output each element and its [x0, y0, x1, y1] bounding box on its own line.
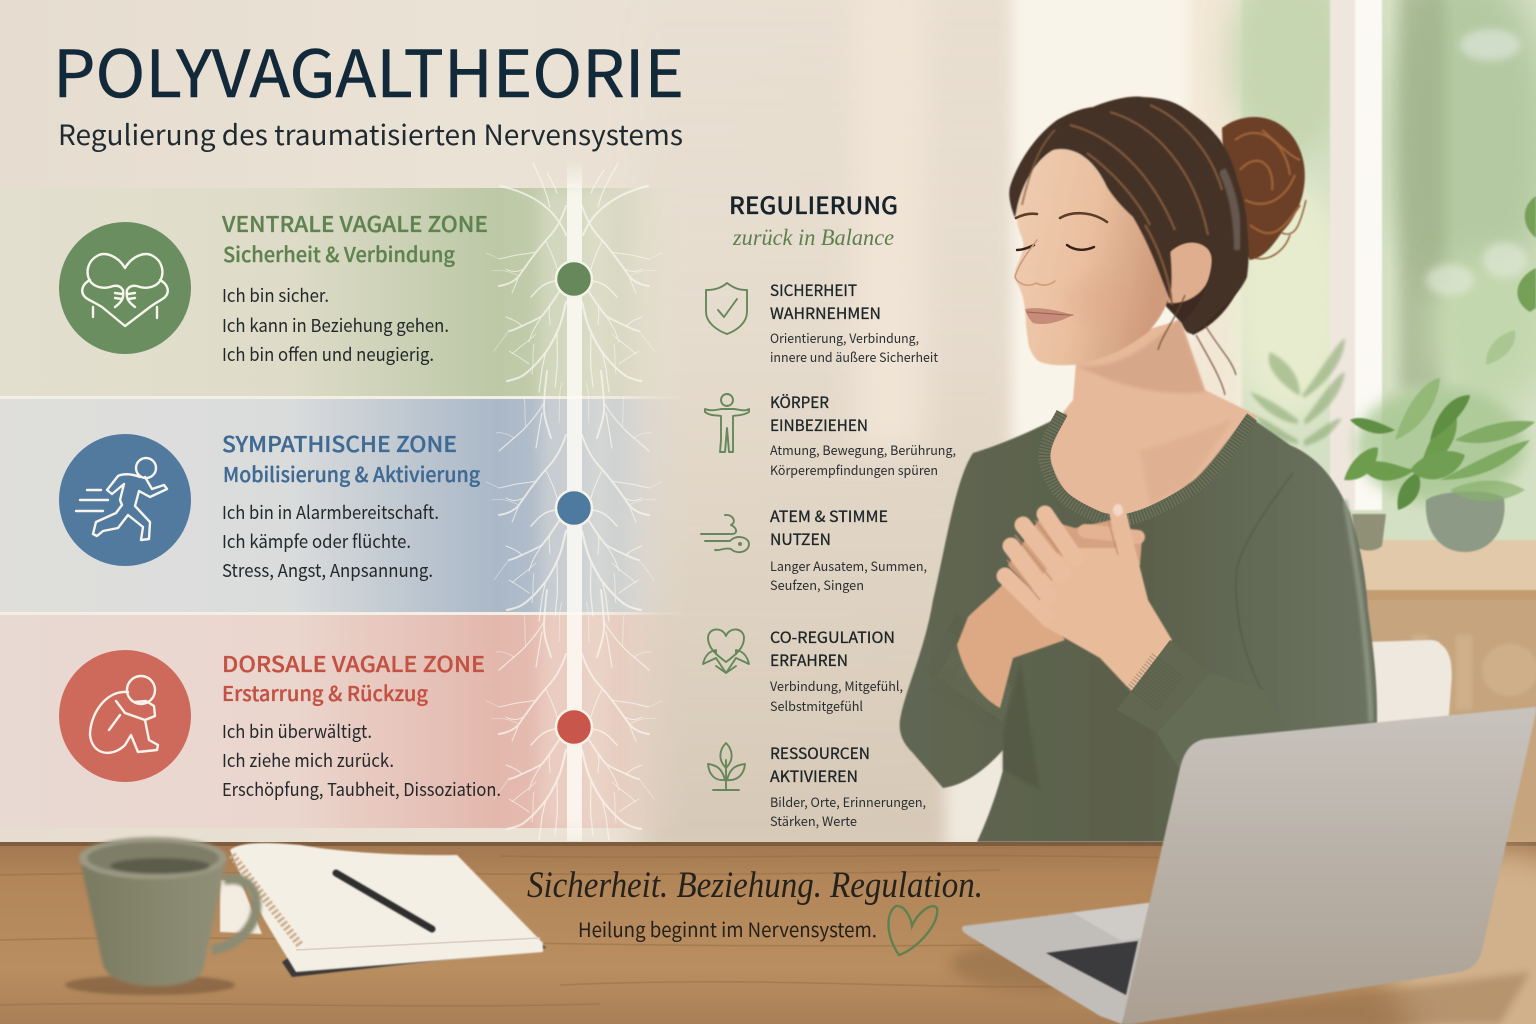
regulation item: Co-Regulation: Verbindung, Mitgefühl, [770, 676, 903, 695]
icon: breath wind [701, 515, 749, 552]
regulation item: Co-Regulation: Selbstmitgefühl [770, 696, 863, 715]
icon: hand-drawn heart [888, 906, 937, 955]
regulation item: Sicherheit wahrnehmen: Orientierung, Verbindung, [770, 328, 919, 347]
hair [1009, 97, 1249, 395]
window sill and shelf [1360, 540, 1536, 845]
neck and chest skin [1040, 320, 1258, 525]
regulation item: Ressourcen aktivieren: Bilder, Orte, Erinnerungen, [770, 792, 926, 811]
regulation item: Ressourcen aktivieren [708, 742, 926, 830]
central glow and band separators [0, 190, 690, 830]
chair back [1365, 640, 1453, 725]
regulation item: Körper einbeziehen: Körperempfindungen spüren [770, 460, 938, 479]
subheading: Mobilisierung & Aktivierung [223, 458, 480, 488]
right sleeve highlight and seams [1345, 500, 1371, 722]
regulation item: Co-Regulation: ERFAHREN [770, 649, 848, 671]
regulation item: Atem und Stimme: Seufzen, Singen [770, 575, 864, 594]
regulation item: Ressourcen aktivieren: Stärken, Werte [770, 811, 857, 830]
woman [900, 97, 1377, 842]
coffee mug [65, 837, 256, 995]
zone band: sympathetic [0, 399, 690, 612]
panel: dorsal vagal zone [59, 647, 501, 802]
regulation item: Körper einbeziehen: Atmung, Bewegung, Berührung, [770, 440, 956, 459]
statements: Erschöpfung, Taubheit, Dissoziation. [222, 776, 501, 802]
regulation item: Atem und Stimme: ATEM & STIMME [770, 505, 888, 527]
top hand [1005, 504, 1172, 692]
title: POLYVAGALTHEORIE [53, 22, 684, 116]
statements: Ich bin offen und neugierig. [222, 341, 434, 367]
left sleeve inner shade [1003, 660, 1040, 790]
regulation item: Atem und Stimme [701, 505, 927, 594]
node: dorsal [556, 709, 592, 745]
regulation item: Co-Regulation: CO-REGULATION [770, 626, 895, 648]
back hand and wrist [957, 575, 1065, 708]
table [0, 842, 1536, 1024]
statements: Stress, Angst, Anpsannung. [222, 557, 433, 583]
regulation item: Sicherheit wahrnehmen: SICHERHEIT [770, 279, 857, 301]
statements: Ich bin in Alarmbereitschaft. [222, 499, 439, 525]
regulation item: Körper einbeziehen: KÖRPER [770, 391, 829, 413]
icon: standing body [705, 394, 749, 452]
notebook and pen [220, 843, 546, 977]
statements [222, 718, 501, 802]
heading: SYMPATHISCHE ZONE [222, 427, 457, 459]
statements: Ich kämpfe oder flüchte. [222, 528, 411, 554]
background fern [1250, 338, 1345, 446]
heading: VENTRALE VAGALE ZONE [221, 207, 488, 239]
icon: running figure [59, 434, 191, 566]
hair bun [1222, 117, 1306, 260]
node: ventral [556, 261, 592, 297]
node: sympathetic [556, 490, 592, 526]
subheading: Erstarrung & Rückzug [222, 677, 428, 707]
subheading: Sicherheit & Verbindung [223, 238, 455, 268]
hair back mass [1160, 110, 1247, 335]
regulation item: Atem und Stimme: NUTZEN [770, 528, 831, 550]
icon: embracing heart [59, 222, 191, 354]
nerve branches [486, 163, 662, 840]
laptop lid [1122, 707, 1536, 1024]
icon: shield with check [706, 283, 747, 334]
window and blurred garden [1230, 0, 1536, 590]
subheading: zurück in Balance: zurück in Balance [732, 225, 894, 250]
regulation item: Ressourcen aktivieren: RESSOURCEN [770, 742, 870, 764]
face [1015, 149, 1172, 365]
panel: ventral vagal zone [59, 207, 488, 367]
regulation item: Sicherheit wahrnehmen: WAHRNEHMEN [770, 302, 881, 324]
zone band: ventral [0, 188, 690, 396]
eyebrows, eyes, nose, lips [1015, 213, 1130, 325]
regulation item: Atem und Stimme: Langer Ausatem, Summen, [770, 556, 927, 575]
closing tagline: Heilung beginnt im Nervensystem. [578, 914, 877, 943]
icon: sprout [708, 743, 745, 790]
sweater [900, 413, 1377, 842]
ear [1165, 242, 1212, 303]
regulation item: Co-Regulation [703, 626, 903, 715]
regulation item: Sicherheit wahrnehmen: innere und äußere Sicherheit [770, 347, 938, 366]
pen [336, 873, 432, 929]
subtitle: Regulierung des traumatisierten Nervensystems [58, 114, 683, 154]
regulation item: Sicherheit wahrnehmen [706, 279, 938, 366]
heading: Regulierung: REGULIERUNG [729, 187, 898, 221]
statements: Ich bin überwältigt. [222, 718, 372, 744]
statements: Ich ziehe mich zurück. [222, 747, 394, 773]
panel: sympathetic zone [59, 427, 480, 583]
regulation item: Körper einbeziehen [705, 391, 956, 479]
icon: curled figure [59, 650, 191, 782]
sweater ribbed collar [1044, 413, 1252, 521]
statements [222, 499, 439, 583]
statements: Ich kann in Beziehung gehen. [222, 312, 449, 338]
laptop [950, 707, 1536, 1024]
hand backing and lower hand fingers [1008, 518, 1142, 610]
heading: DORSALE VAGALE ZONE [222, 647, 485, 679]
regulation item: Ressourcen aktivieren: AKTIVIEREN [770, 765, 858, 787]
regulation item: Körper einbeziehen: EINBEZIEHEN [770, 414, 868, 436]
closing slogan: Sicherheit. Beziehung. Regulation. [527, 865, 983, 906]
zone band: dorsal [0, 615, 690, 828]
upper arcs [500, 163, 648, 235]
central vagus axis [567, 160, 582, 841]
keyboard [1046, 941, 1138, 995]
potted plant on sill [1344, 196, 1536, 552]
laptop base [962, 903, 1170, 1024]
statements: Ich bin sicher. [222, 282, 329, 308]
statements [222, 282, 449, 367]
right forearm [1157, 673, 1290, 770]
icon: heart held by hands [703, 629, 749, 673]
left cuff [937, 637, 1012, 722]
right cuff [1117, 640, 1210, 733]
